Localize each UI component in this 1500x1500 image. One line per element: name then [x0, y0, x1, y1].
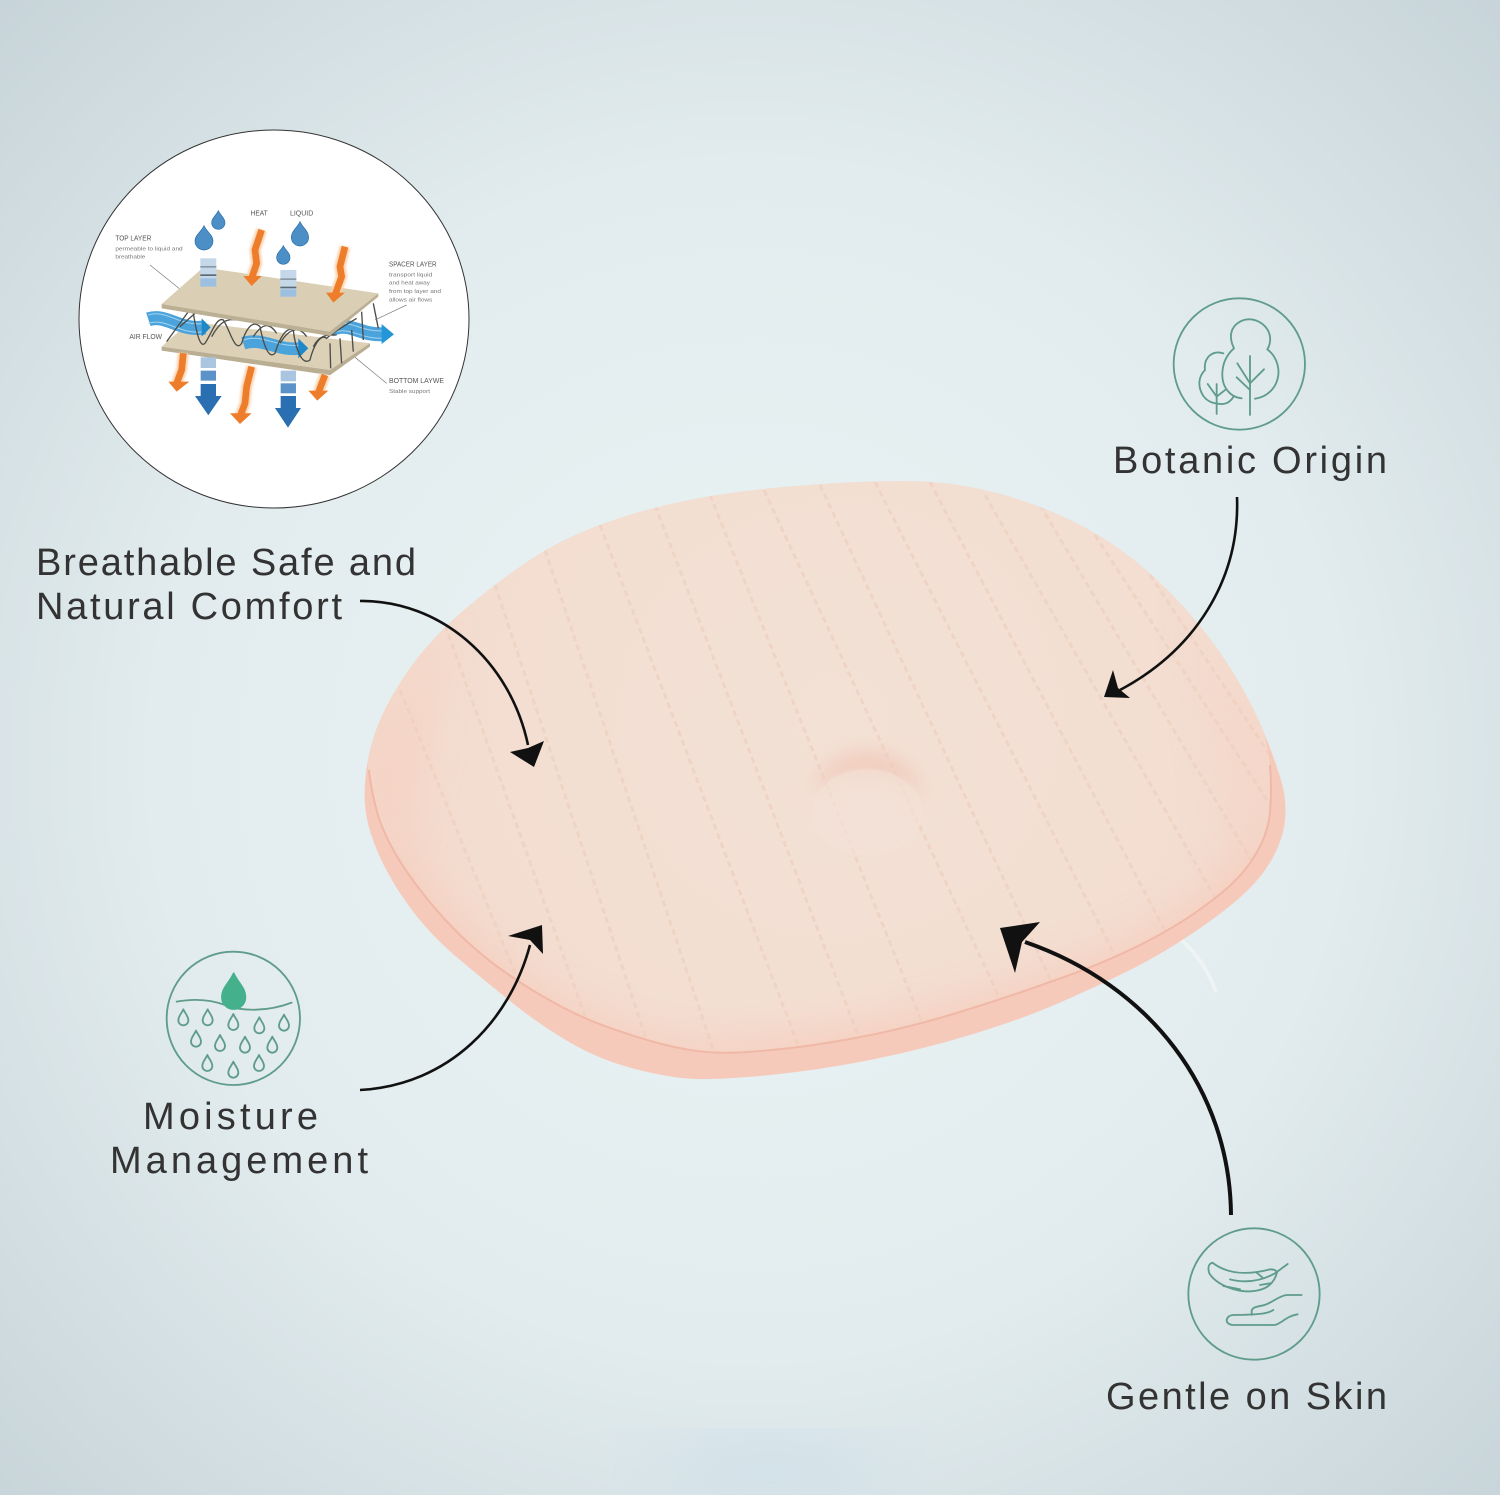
diagram air flow [148, 314, 394, 358]
diagram top layer [162, 267, 378, 336]
diagram liquid columns [195, 258, 301, 428]
diagram labels: HEAT [251, 209, 268, 218]
pillow seam [369, 765, 1271, 1053]
icon: trees [1174, 298, 1305, 430]
fabric stripes [400, 482, 1280, 1055]
diagram labels: TOP LAYER [115, 234, 151, 243]
pillow head dimple [812, 751, 925, 855]
text: Moisture Management [110, 1096, 368, 1182]
diagram labels: transport liquid [389, 272, 432, 278]
text: Breathable Safe and Natural Comfort: Breathable Safe and [36, 542, 416, 584]
heading: Gentle on Skin: Gentle on Skin [1106, 1376, 1387, 1418]
panel: layered fabric diagram [79, 130, 469, 508]
pillow [340, 460, 1300, 1080]
diagram labels: AIR FLOW [129, 332, 162, 341]
arrow: botanic [1104, 497, 1237, 698]
diagram labels: LIQUID [290, 209, 313, 218]
text: Breathable Safe and Natural Comfort [36, 542, 416, 628]
diagram leader lines [150, 265, 407, 383]
diagram labels: breathable [115, 255, 145, 261]
text: Breathable Safe and Natural Comfort: Natural Comfort [36, 586, 342, 628]
icon: moisture drops [167, 952, 300, 1085]
text: Moisture Management: Moisture [143, 1096, 318, 1138]
arrow: gentle on skin [1000, 922, 1231, 1215]
arrow: breathable [360, 601, 544, 767]
wire behind pillow [1175, 935, 1216, 992]
diagram labels: from top layer and [389, 289, 441, 295]
diagram labels [115, 209, 444, 395]
diagram labels: allows air flows [389, 297, 432, 303]
diagram labels: SPACER LAYER [389, 259, 437, 268]
diagram labels: BOTTOM LAYWE [389, 376, 444, 385]
diagram bottom layer [162, 322, 370, 375]
diagram spacer fibres [167, 303, 378, 368]
diagram labels: and heat away [389, 281, 430, 287]
text: Moisture Management: Management [110, 1140, 368, 1182]
heading: Botanic Origin: Botanic Origin [1113, 440, 1387, 482]
diagram labels: Stable support [389, 389, 430, 395]
diagram blue drops [195, 211, 309, 264]
diagram labels: permeable to liquid and [115, 247, 183, 253]
diagram orange heat arrows [168, 230, 345, 424]
icon: feather and hand [1188, 1228, 1320, 1360]
arrow: moisture [360, 925, 543, 1090]
